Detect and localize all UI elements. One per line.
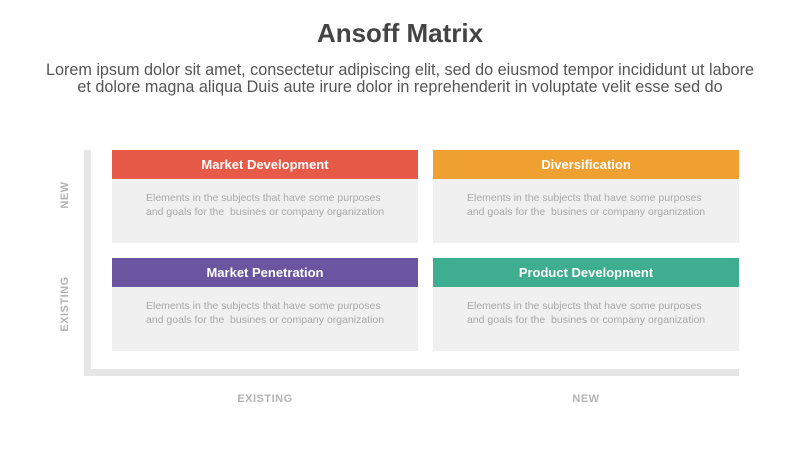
panel: product development [433, 258, 739, 351]
panel: diversification: Elements in the subjects that have some purposes [467, 192, 702, 204]
y label: existing: EXISTING [59, 276, 71, 332]
panel: product development: and goals for the busines or company organization [467, 314, 705, 326]
subtitle: Lorem ipsum dolor sit amet, consectetur adipiscing elit, sed do eiusmod tempor incididunt ut labore [46, 61, 754, 79]
panel: diversification [433, 150, 739, 243]
panel: market penetration [112, 258, 418, 351]
subtitle: et dolore magna aliqua Duis aute irure dolor in reprehenderit in voluptate velit esse sed do [77, 78, 723, 96]
panel: market development [112, 150, 418, 243]
panel: market penetration: Elements in the subjects that have some purposes [146, 300, 381, 312]
panel: market development: Elements in the subjects that have some purposes [146, 192, 381, 204]
panel: market penetration: Market Penetration [206, 265, 324, 280]
panel: product development: Elements in the subjects that have some purposes [467, 300, 702, 312]
x label: existing: EXISTING [237, 393, 293, 405]
panel: diversification: Diversification [541, 157, 631, 172]
subtitle [46, 61, 754, 96]
panel: market penetration: and goals for the busines or company organization [146, 314, 384, 326]
panel: market development: Market Development [201, 157, 329, 172]
panel: product development: Product Development [519, 265, 653, 280]
axis lines [84, 150, 91, 376]
y label: new: NEW [59, 181, 71, 209]
title: Ansoff Matrix [317, 18, 483, 48]
panel: diversification: and goals for the busines or company organization [467, 206, 705, 218]
x label: new: NEW [572, 393, 600, 405]
panel: market development: and goals for the busines or company organization [146, 206, 384, 218]
